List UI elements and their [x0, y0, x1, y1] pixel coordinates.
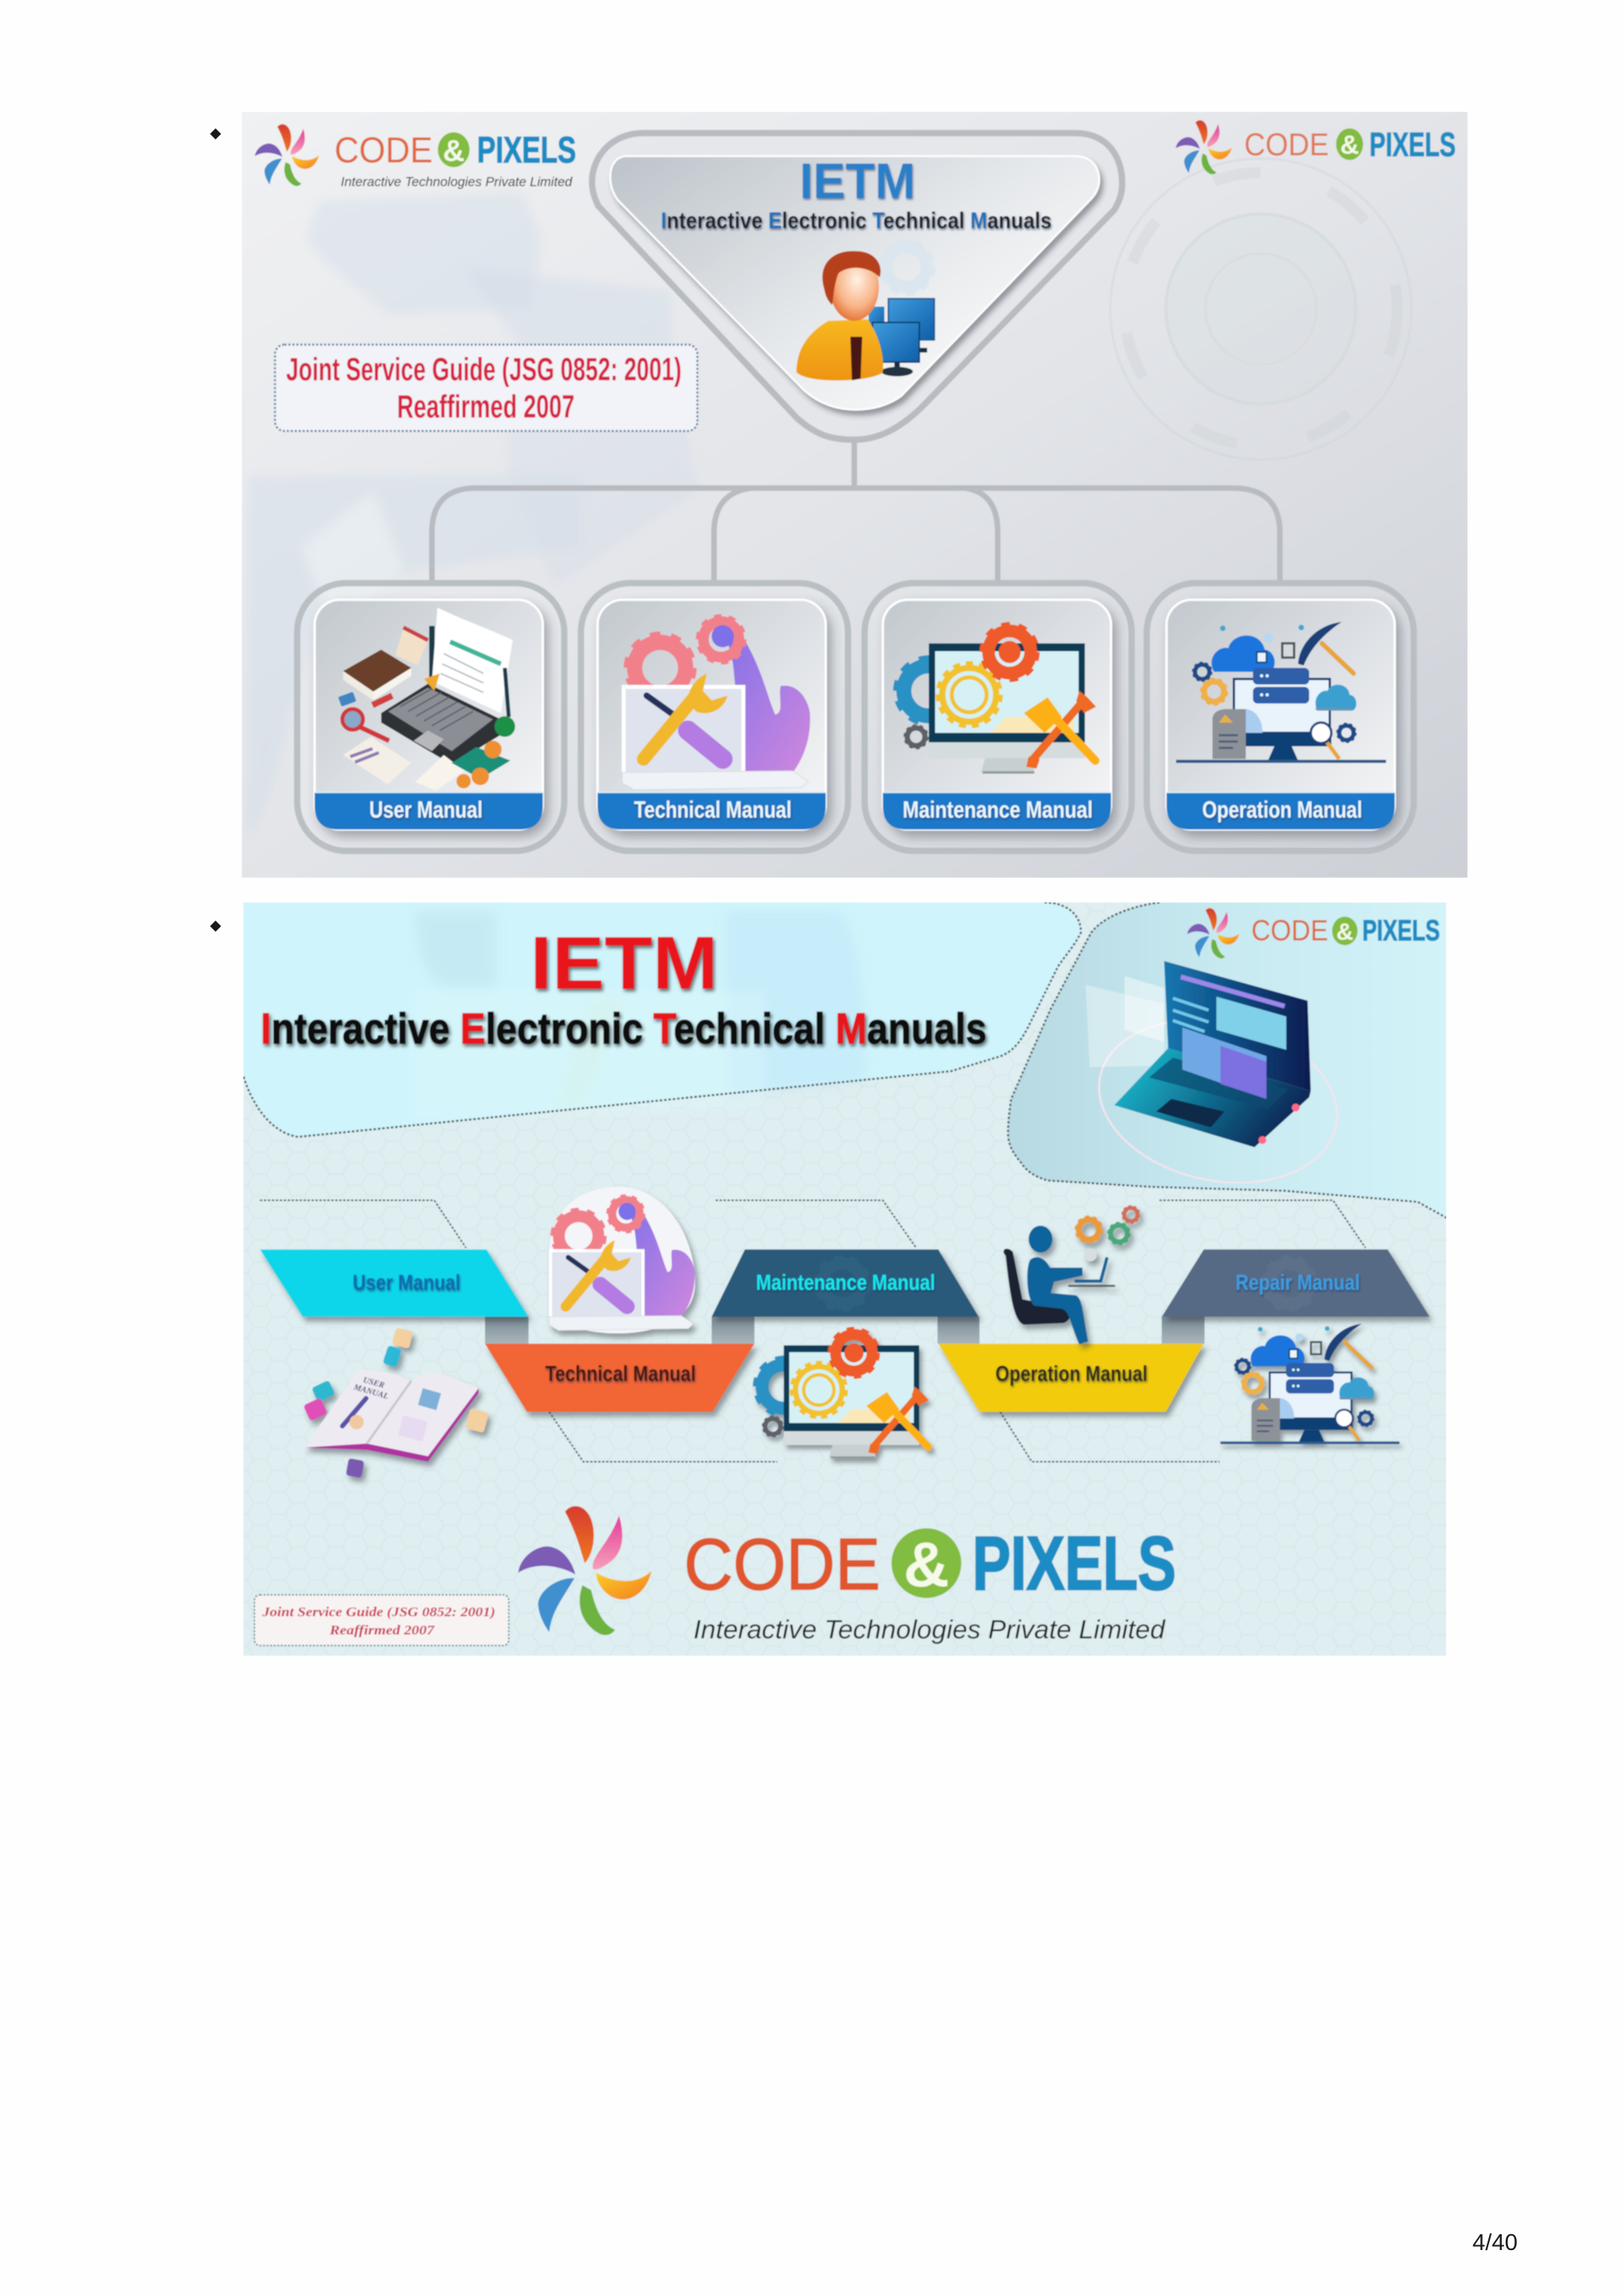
- logo: Code & Pixels left with tagline: PIXELS: [477, 129, 576, 170]
- tree connector lines: [432, 440, 1280, 580]
- ribbon: Repair Manual: [1162, 1249, 1430, 1317]
- callout: Joint Service Guide: [275, 345, 697, 431]
- callout: Joint Service Guide small: [254, 1595, 509, 1646]
- label: Technical Manual: Technical Manual: [634, 797, 792, 823]
- logo: Code & Pixels left with tagline: [255, 124, 576, 189]
- icon: open user manual book with puzzle pieces: USER: [362, 1376, 385, 1390]
- logo: Code & Pixels top right: CODE: [1251, 914, 1328, 947]
- card: Maintenance Manual: [865, 583, 1132, 851]
- callout: Joint Service Guide small: Joint Service Guide (JSG 0852: 2001): [262, 1604, 495, 1619]
- label: User Manual: User Manual: [369, 797, 483, 823]
- ribbon: Maintenance Manual: Maintenance Manual: [756, 1270, 935, 1295]
- blob: laptop background: [1008, 902, 1446, 1218]
- triangle IETM badge: [592, 133, 1122, 440]
- bullet marker for second slide: [210, 921, 221, 932]
- label: Maintenance Manual: Maintenance Manual: [903, 797, 1093, 823]
- ribbon: Operation Manual: [938, 1344, 1204, 1412]
- logo: large Code & Pixels with tagline: Interactive Technologies Private Limited: [693, 1615, 1167, 1644]
- ribbon: Repair Manual: Repair Manual: [1235, 1270, 1360, 1295]
- icon: maintenance monitor: [757, 1330, 929, 1458]
- callout: Joint Service Guide: Reaffirmed 2007: [397, 388, 575, 425]
- panel: IETM hierarchy slide: [242, 112, 1468, 878]
- card: Technical Manual: [581, 583, 848, 851]
- logo: Code & Pixels top right: [1187, 908, 1440, 959]
- panel: IETM ribbon slide: [243, 902, 1446, 1656]
- callout: Joint Service Guide small: Reaffirmed 2007: [329, 1623, 436, 1638]
- blob: title background: [243, 902, 1081, 1137]
- ribbon: User Manual: User Manual: [353, 1270, 460, 1295]
- logo: large Code & Pixels with tagline: CODE: [684, 1524, 880, 1605]
- logo: Code & Pixels right: CODE: [1244, 128, 1329, 162]
- icon: gear behind person: [881, 242, 932, 292]
- ribbon connectors: [485, 1317, 1205, 1344]
- ribbon: Maintenance Manual: [712, 1249, 979, 1317]
- card: User Manual: [297, 583, 564, 851]
- ribbon: Technical Manual: [485, 1344, 754, 1412]
- ghost concentric circles: [1110, 158, 1411, 460]
- heading: IETM red: IETM: [530, 921, 718, 1005]
- icon: repair server and cloud: [1220, 1324, 1400, 1443]
- logo: Code & Pixels top right: PIXELS: [1362, 914, 1440, 947]
- icon: seated operator with gears: [1003, 1206, 1140, 1344]
- heading: Interactive Electronic Technical Manuals: Interactive Electronic Technical Manuals: [261, 1004, 987, 1053]
- logo: Code & Pixels left with tagline: Interactive Technologies Private Limited: [341, 174, 573, 189]
- icon: laptop, gears and tools: [622, 617, 810, 790]
- icon: man with computers: [796, 251, 934, 380]
- icon: open user manual book with puzzle pieces: MANUAL: [352, 1383, 389, 1402]
- bullet marker for first slide: [210, 128, 221, 139]
- logo: Code & Pixels right: [1176, 120, 1456, 174]
- ribbon: Technical Manual: Technical Manual: [545, 1361, 696, 1386]
- heading: Interactive Electronic Technical Manuals: Interactive Electronic Technical Manuals: [661, 208, 1052, 234]
- icon: technical tools in white blob: [549, 1187, 695, 1333]
- icon: server, cloud and monitor: [1176, 622, 1386, 761]
- logo: Code & Pixels left with tagline: &: [443, 135, 464, 168]
- label: Operation Manual: Operation Manual: [1202, 797, 1362, 823]
- logo: Code & Pixels left with tagline: CODE: [334, 130, 433, 170]
- card: Operation Manual: [1147, 583, 1414, 851]
- ribbon: User Manual: [260, 1249, 529, 1317]
- dashed guide lines: [260, 1200, 1365, 1462]
- page number: 4/40: [1472, 2230, 1518, 2256]
- logo: large Code & Pixels with tagline: PIXELS: [972, 1521, 1176, 1606]
- logo: large Code & Pixels with tagline: &: [903, 1529, 949, 1600]
- icon: floating screens laptop: [1084, 961, 1352, 1203]
- callout: Joint Service Guide: Joint Service Guide (JSG 0852: 2001): [286, 351, 682, 387]
- logo: Code & Pixels right: PIXELS: [1369, 126, 1456, 164]
- logo: Code & Pixels right: &: [1340, 130, 1359, 159]
- icon: monitor with gears and tools: [897, 626, 1096, 772]
- heading: IETM: IETM: [800, 154, 915, 209]
- icon: laptop and documents collage: [338, 608, 515, 791]
- ribbon: Operation Manual: Operation Manual: [995, 1361, 1148, 1386]
- icon: open user manual book with puzzle pieces: [303, 1328, 489, 1478]
- logo: large Code & Pixels with tagline: [518, 1506, 1176, 1644]
- logo: Code & Pixels top right: &: [1336, 919, 1354, 945]
